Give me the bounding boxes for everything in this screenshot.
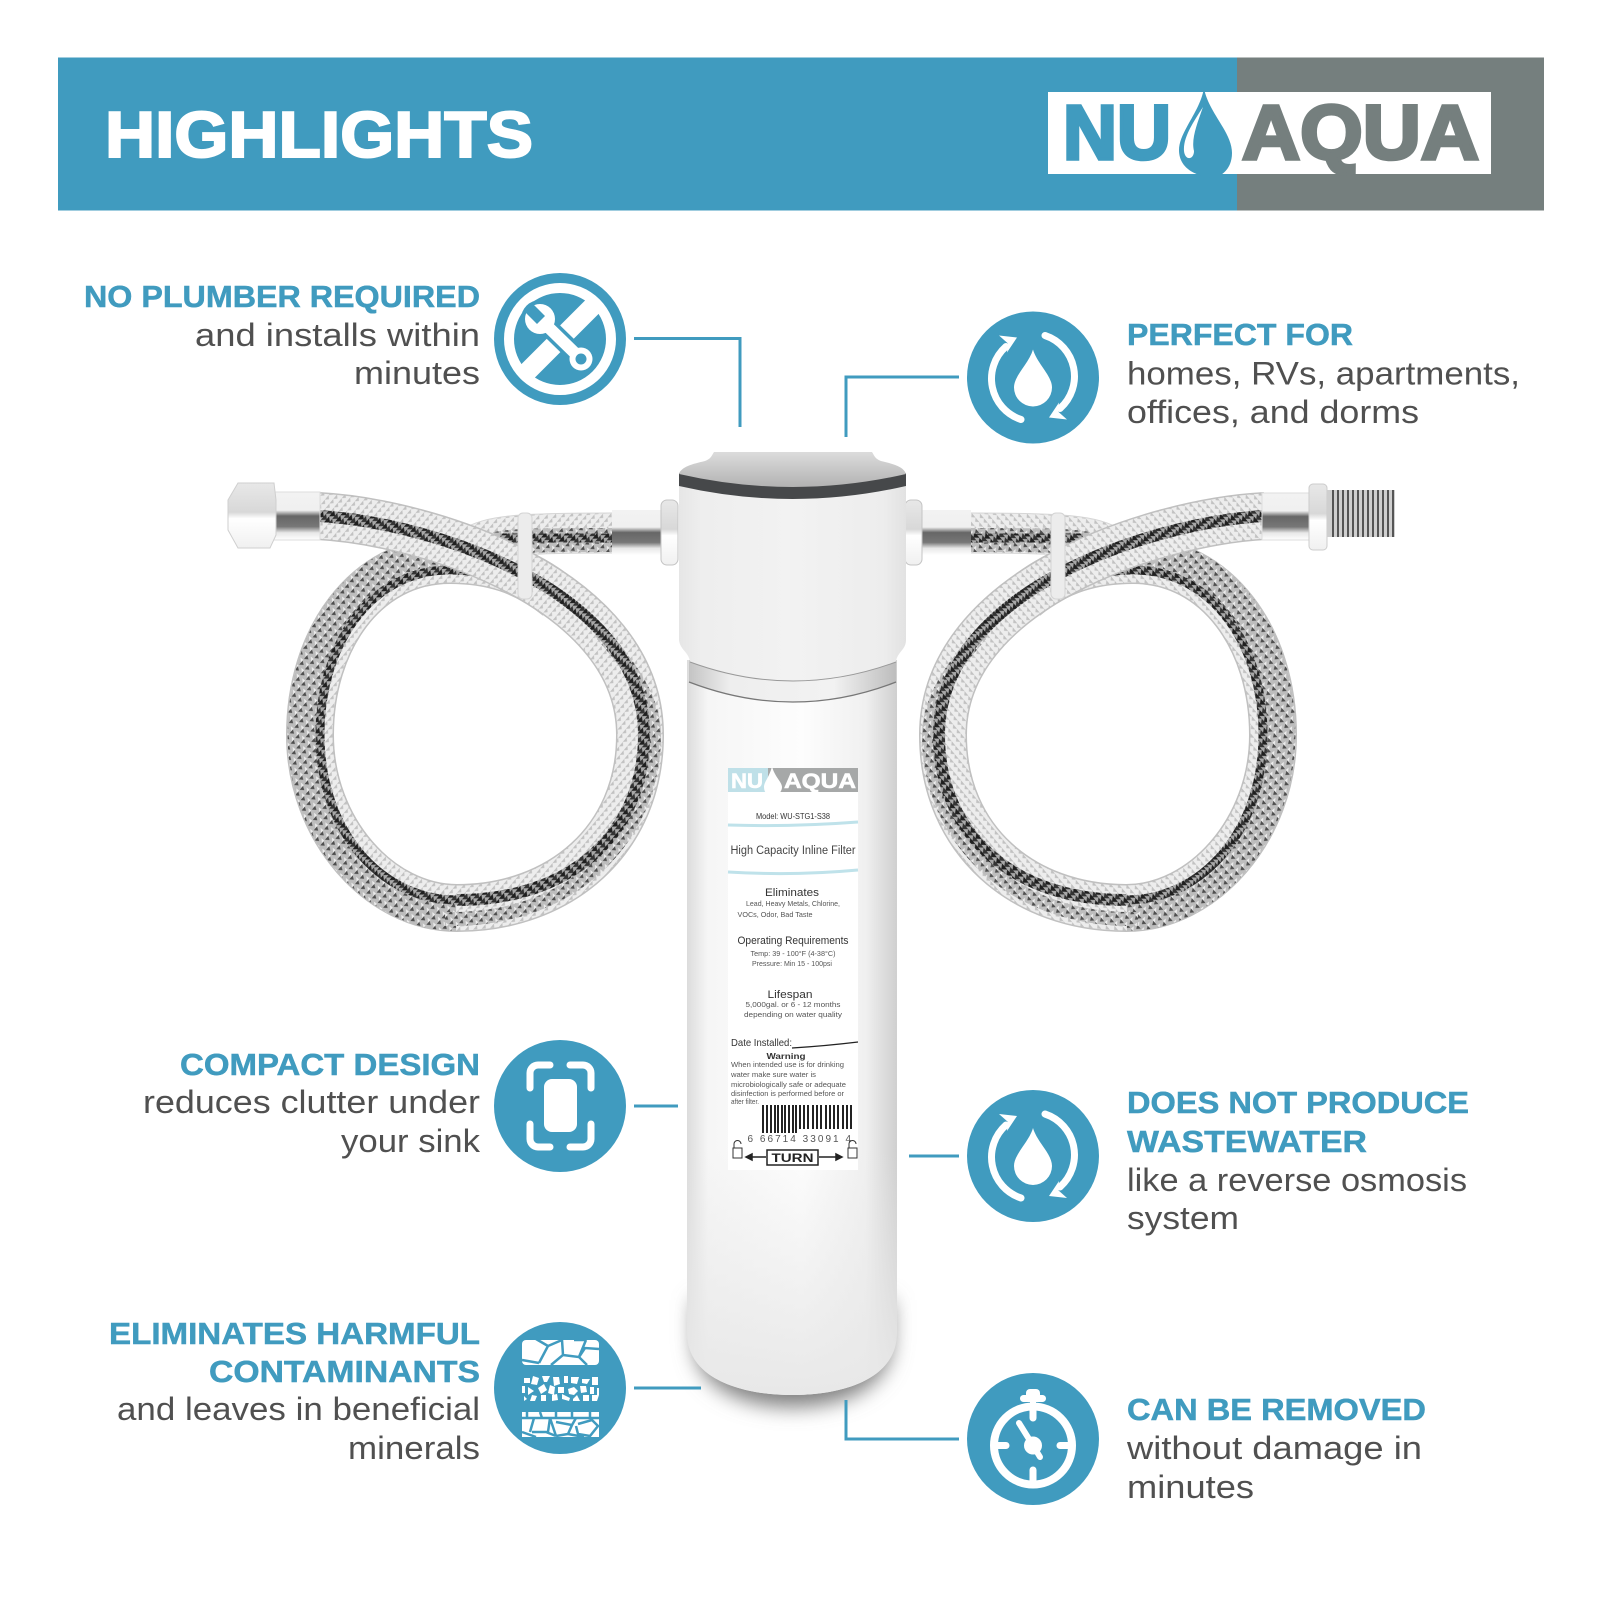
product: inline water filter [679,452,906,1407]
icon: water recycle [967,312,1099,444]
callout: perfect for: PERFECT FOR [1127,317,1353,352]
callout: can be removed: without damage in [1126,1430,1422,1466]
product label: VOCs, Odor, Bad Taste [738,910,812,919]
product label: disinfection is performed before or [731,1089,844,1098]
product label: High Capacity Inline Filter [730,845,856,857]
product label: Date Installed: [731,1037,792,1049]
callout: eliminates contaminants: minerals [348,1430,480,1466]
icon: no tools [494,273,626,405]
connector: wastewater [909,1154,959,1158]
connector: no plumber [634,338,740,427]
callout: perfect for: homes, RVs, apartments, [1127,356,1520,392]
product label: Temp: 39 - 100°F (4-38°C) [750,949,836,958]
label logo: AQUA [784,770,856,793]
label logo [728,766,858,796]
callout: eliminates contaminants [109,1316,480,1466]
filter cap [679,452,906,499]
callout: does not produce wastewater: system [1127,1200,1239,1236]
callout: eliminates contaminants: and leaves in beneficial [117,1391,480,1427]
filter head [679,480,906,681]
product label: 6 66714 33091 4 [748,1134,852,1145]
barcode [763,1105,851,1133]
silver band [689,660,896,702]
connector: contaminants [634,1386,701,1390]
callout: does not produce wastewater: like a reverse osmosis [1127,1162,1467,1198]
icon: filter layers [494,1322,626,1454]
product label: water make sure water is [730,1070,816,1079]
icon: stopwatch [967,1373,1099,1505]
callout: no plumber required: minutes [354,355,480,391]
callout: eliminates contaminants: CONTAMINANTS [209,1354,480,1389]
product label: after filter. [731,1097,759,1106]
product label [728,766,858,1170]
callout: compact design [143,1047,481,1159]
connector: compact design [634,1104,678,1108]
product label: Lifespan [768,989,812,1001]
icon: water recycle [967,1090,1099,1222]
product label: 5,000gal. or 6 - 12 months [746,1000,841,1009]
product label: When intended use is for drinking [731,1060,844,1069]
callout: compact design: COMPACT DESIGN [180,1047,480,1082]
product label: Eliminates [765,887,820,899]
product label: microbiologically safe or adequate [731,1080,846,1089]
callout: does not produce wastewater: WASTEWATER [1127,1124,1367,1159]
brand logo: NU [1063,90,1171,176]
label logo: NU [731,770,763,793]
callout: can be removed [1126,1392,1426,1505]
product label: Warning [766,1051,806,1061]
callout: can be removed: minutes [1127,1469,1254,1505]
turn marking with locks [733,1140,857,1165]
callout: perfect for: offices, and dorms [1127,394,1419,430]
product label: Lead, Heavy Metals, Chlorine, [746,899,840,908]
callout: perfect for [1127,317,1520,430]
turn marking with locks: TURN [772,1153,814,1165]
left hose nut [228,483,320,548]
right coiled braided hose [905,484,1395,919]
callout: does not produce wastewater: DOES NOT PRODUCE [1127,1085,1469,1120]
callout: no plumber required: NO PLUMBER REQUIRED [84,279,480,314]
product label: Operating Requirements [738,935,849,947]
callout: no plumber required [84,279,480,391]
filter drop shadow [694,1300,892,1407]
title: HIGHLIGHTS [105,98,533,171]
product label: Model: WU-STG1-S38 [756,812,830,821]
left coiled braided hose [228,483,678,919]
filter body [687,660,897,1395]
product label: Pressure: Min 15 - 100psi [752,959,832,968]
callout: can be removed: CAN BE REMOVED [1127,1392,1426,1427]
brand logo: AQUA [1242,90,1479,176]
product label: depending on water quality [744,1010,842,1019]
right threaded fitting [1262,484,1395,550]
icon: compact [494,1040,626,1172]
header banner [58,58,1544,210]
callout: compact design: your sink [341,1123,481,1159]
callout: eliminates contaminants: ELIMINATES HARMFUL [109,1316,480,1351]
connector: removal [846,1400,959,1439]
brand logo [1048,88,1491,178]
callout: does not produce wastewater [1127,1085,1469,1236]
connector: perfect for [846,377,959,437]
callout: no plumber required: and installs within [195,317,480,353]
callout: compact design: reduces clutter under [143,1084,480,1120]
